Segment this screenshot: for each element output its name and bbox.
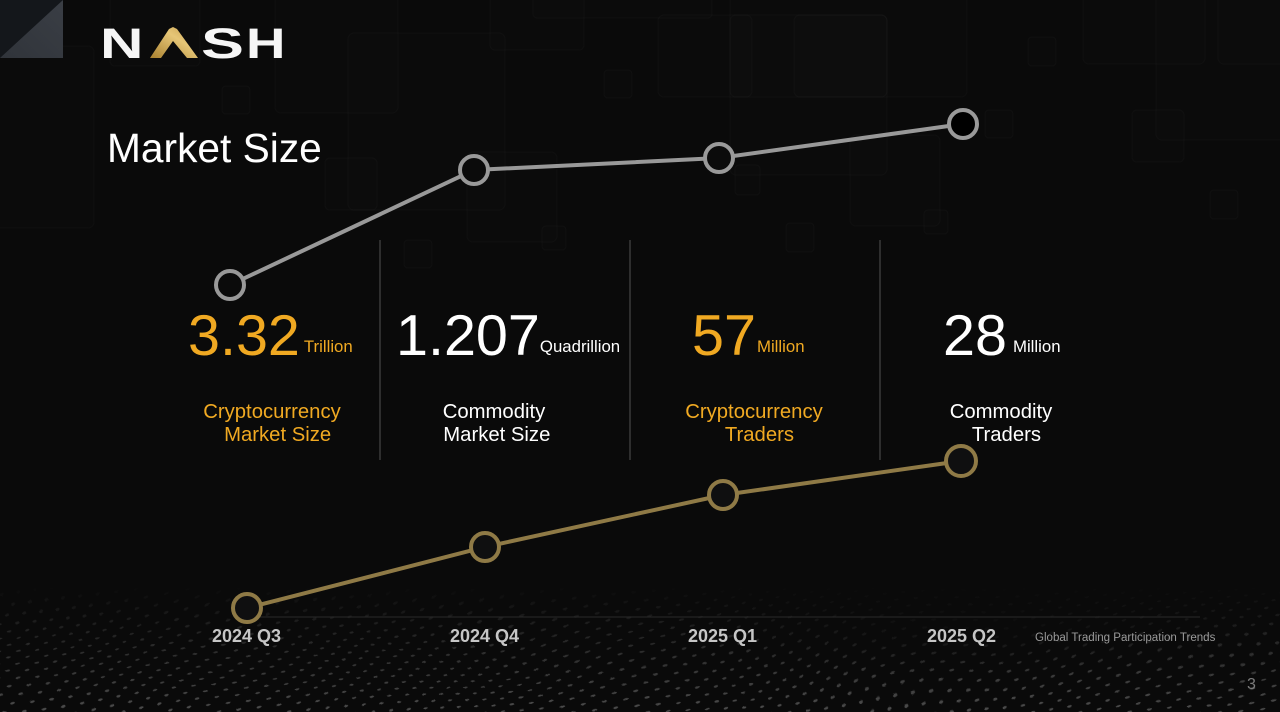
background dot mesh (0, 602, 1280, 712)
title: Market Size (107, 125, 322, 171)
chart caption: Global Trading Participation Trends (1035, 632, 1215, 644)
dividers (380, 240, 880, 460)
background mesh shadow (680, 575, 1280, 675)
logo: NASH: H (246, 20, 285, 68)
background rounded squares (0, 0, 1280, 268)
label: cryptocurrency market size: Cryptocurrency Market Size (203, 401, 341, 446)
axis baseline (258, 616, 1200, 618)
logo: NASH (100, 19, 285, 68)
logo: NASH: N (100, 20, 143, 68)
corner fold graphic (0, 0, 63, 58)
axis label: 2024 Q4: 2024 Q4 (450, 626, 519, 646)
stat: cryptocurrency traders: 57Million (692, 304, 805, 368)
label: commodity traders: Commodity Traders (950, 401, 1052, 446)
axis label: 2025 Q2: 2025 Q2 (927, 626, 996, 646)
stat: commodity market size: 1.207Quadrillion (396, 304, 620, 368)
label: cryptocurrency traders: Cryptocurrency Traders (685, 401, 823, 446)
page number: 3 (1247, 676, 1256, 693)
stat: cryptocurrency market size: 3.32Trillion (188, 304, 353, 368)
logo: NASH: S (201, 19, 244, 67)
stat: commodity traders: 28 Million (943, 304, 1061, 368)
grey line chart: commodity trend (216, 110, 977, 299)
axis label: 2025 Q1: 2025 Q1 (688, 626, 757, 646)
axis label: 2024 Q3: 2024 Q3 (212, 626, 281, 646)
gold line chart: trading participation trend (233, 446, 976, 622)
label: commodity market size: Commodity Market Size (438, 401, 550, 446)
